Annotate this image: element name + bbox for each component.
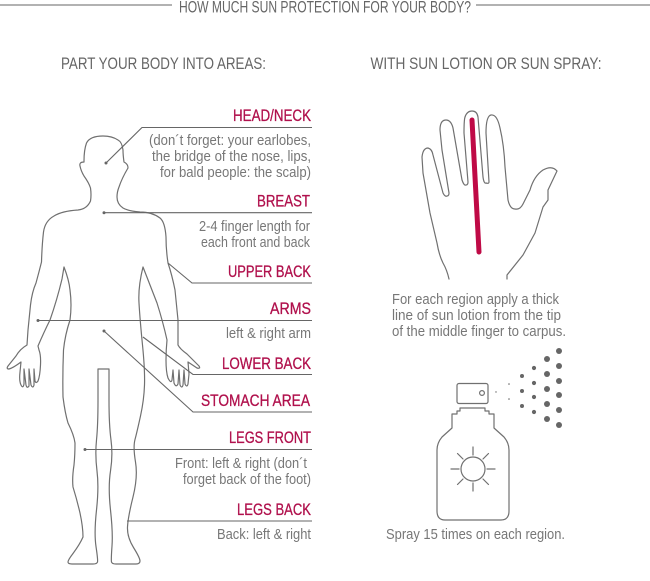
- label: legs front: Front: left & right (don´t: [175, 455, 308, 472]
- label: legs back: [127, 501, 312, 543]
- label: legs back: LEGS BACK: [237, 501, 311, 519]
- label: upper back: [168, 263, 312, 283]
- label: legs front: [84, 429, 312, 488]
- label: breast: BREAST: [257, 193, 310, 211]
- label: head/neck: HEAD/NECK: [233, 107, 311, 125]
- icon: sun: [451, 447, 495, 491]
- label: arms: [36, 300, 312, 342]
- text: spray instructions: Spray 15 times on each region.: [386, 526, 565, 543]
- label: legs back: Back: left & right: [217, 526, 312, 543]
- label: upper back: UPPER BACK: [228, 263, 311, 281]
- label: head/neck: for bald people: the scalp): [160, 164, 311, 181]
- icon: lotion line: [472, 120, 479, 252]
- label: head/neck: [104, 107, 312, 181]
- label: lower back: LOWER BACK: [222, 355, 311, 373]
- text: lotion instructions: [392, 291, 566, 340]
- body outline figure: [7, 136, 200, 564]
- label: head/neck: (don´t forget: your earlobes,: [149, 132, 311, 149]
- text: lotion instructions: line of sun lotion from the tip: [392, 307, 561, 324]
- text: lotion instructions: of the middle finger to carpus.: [392, 323, 566, 340]
- label: arms: ARMS: [270, 300, 311, 318]
- heading: part your body: PART YOUR BODY INTO AREAS:: [61, 55, 266, 73]
- text: lotion instructions: For each region apply a thick: [392, 291, 559, 308]
- icon: spray dots: [495, 348, 562, 428]
- heading: lotion or spray: WITH SUN LOTION OR SUN SPRAY:: [370, 55, 602, 73]
- label: legs front: forget back of the foot): [183, 471, 311, 488]
- icon: hand outline: [422, 111, 557, 279]
- icon: spray bottle: [437, 384, 509, 520]
- label: legs front: LEGS FRONT: [229, 429, 311, 447]
- label: breast: [102, 193, 312, 251]
- label: lower back: [143, 337, 312, 374]
- label: head/neck: the bridge of the nose, lips,: [152, 148, 311, 165]
- label: stomach area: STOMACH AREA: [201, 392, 310, 410]
- label: stomach area: [102, 330, 312, 412]
- label: breast: 2-4 finger length for: [199, 218, 310, 235]
- label: arms: left & right arm: [226, 325, 311, 342]
- label: breast: each front and back: [201, 234, 310, 251]
